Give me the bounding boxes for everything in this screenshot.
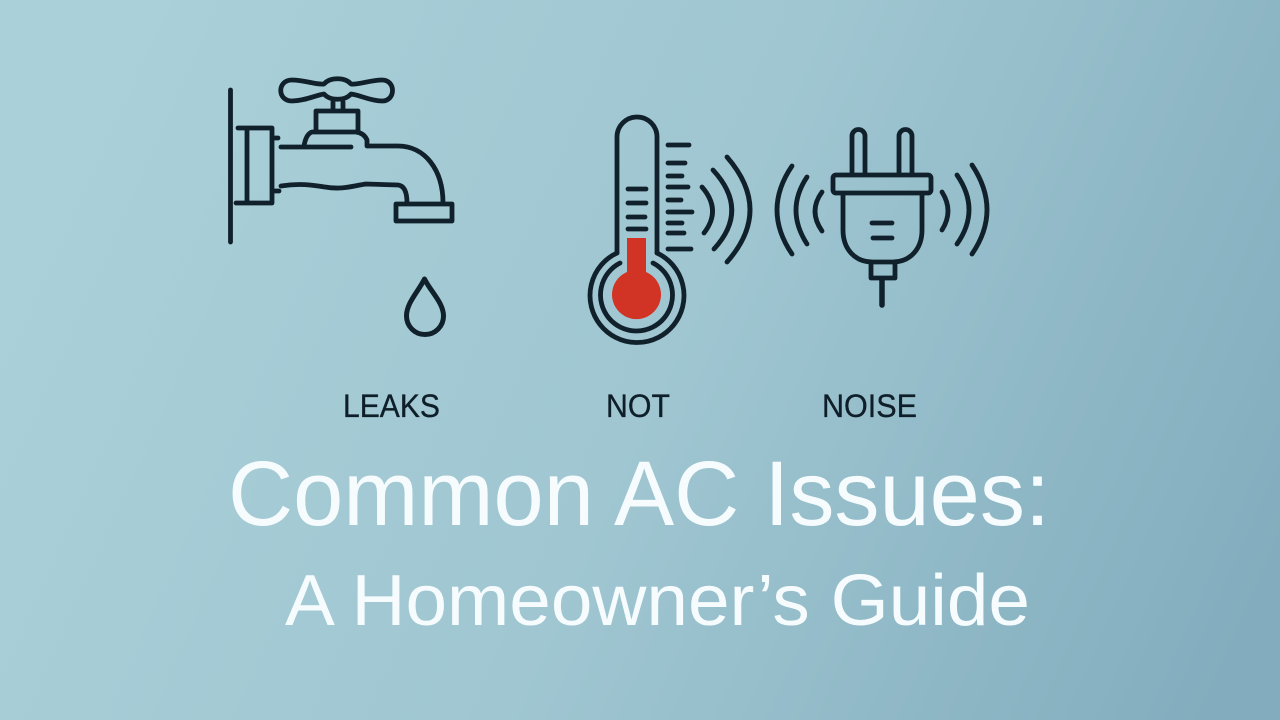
title: Common AC Issues: [228,443,1050,545]
subtitle: A Homeowner’s Guide [285,561,1030,641]
label: noise: NOISE [822,388,917,424]
icon: noisy plug [777,130,987,305]
label: not: NOT [606,388,670,424]
icon: leaking faucet [230,79,452,334]
icon: water drop [406,279,444,334]
icon: thermometer with red fill [590,117,750,343]
label: leaks: LEAKS [343,388,440,424]
thermometer red mercury [612,238,661,319]
